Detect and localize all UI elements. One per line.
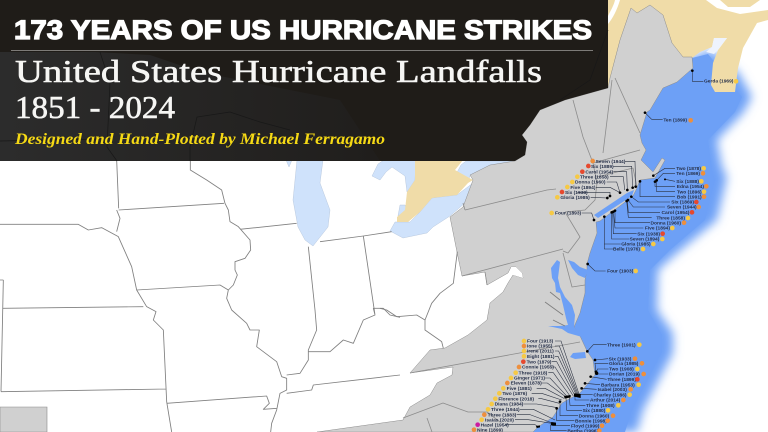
landfall labels: Maine and Nova Scotia xyxy=(691,69,738,85)
inland labels with dots: Isaias (2020) xyxy=(485,417,514,423)
offshore labels with dots: Six (1869) xyxy=(671,200,694,206)
landfall labels: Ten 1899: Ten (1899) xyxy=(663,118,687,124)
Ohio and Kentucky state borders xyxy=(380,252,457,348)
offshore labels with dots: Six (1933) xyxy=(609,356,632,362)
offshore labels with dots: Barbara (1953) xyxy=(601,382,635,388)
inland labels with dots xyxy=(549,159,626,217)
inland labels with dots: Five (1881) xyxy=(507,386,532,392)
panel: lighter map area under banner xyxy=(0,52,380,161)
inland labels with dots: Gloria (1985) xyxy=(560,195,590,201)
inland labels with dots: Three (1883) xyxy=(488,412,517,418)
offshore labels with dots: Arthur (2014) xyxy=(590,398,621,404)
subtitle line 2: 1851 - 2024 xyxy=(15,89,175,125)
offshore labels with dots: Two (1878) xyxy=(676,166,701,172)
White West Virginia notch fill xyxy=(511,267,523,278)
Long Island Sound xyxy=(594,190,634,218)
title panel xyxy=(0,0,608,161)
offshore labels with dots: Seven (1894) xyxy=(630,237,660,243)
offshore labels with dots: Donna (1960) xyxy=(579,413,610,419)
offshore labels with dots: Dorian (2019) xyxy=(609,372,640,378)
panel: ghost map lines xyxy=(0,30,608,161)
connectors xyxy=(505,341,608,431)
offshore labels with dots: Five (1894) xyxy=(645,226,670,232)
Minas Basin xyxy=(706,38,727,54)
landfall labels: New York and New England xyxy=(549,159,709,275)
Gulf of St Lawrence xyxy=(706,0,768,14)
landfall labels: North Carolina xyxy=(472,339,646,432)
offshore labels with dots: Carol (1954) xyxy=(662,210,690,216)
inland labels with dots: Two (1879) xyxy=(527,359,552,365)
St Lawrence river xyxy=(608,0,620,24)
inland labels with dots: Three (1858) xyxy=(580,174,609,180)
Chesapeake Bay xyxy=(548,260,582,337)
offshore labels with dots: Six (1888) xyxy=(676,179,699,185)
Midwest state borders xyxy=(0,160,400,432)
label: Gerda: Gerda (1969) xyxy=(704,79,734,85)
inland labels with dots: Five (1894) xyxy=(570,185,596,191)
offshore labels with dots: Ten (1869) xyxy=(676,171,700,177)
inland labels with dots: Four (1913) xyxy=(527,339,554,345)
inland labels with dots: Six (1889) xyxy=(591,164,614,170)
Eastern state borders xyxy=(403,78,640,432)
inland labels with dots: Florence (2018) xyxy=(498,396,534,402)
inland labels with dots: Six (1938) xyxy=(565,190,588,196)
subtitle line 1: United States Hurricane Landfalls xyxy=(15,53,542,89)
Canada: eastern provinces xyxy=(608,0,768,92)
inland labels with dots: Donna (1960) xyxy=(575,180,606,186)
inland labels with dots: Eleven (1878) xyxy=(511,381,542,387)
offshore labels with dots xyxy=(607,166,709,275)
Virginia river lines xyxy=(545,292,565,326)
inland labels with dots: Seven (1944) xyxy=(596,159,626,165)
landfall points xyxy=(586,174,666,265)
offshore labels with dots: Bob (1991) xyxy=(677,194,702,200)
Albemarle Sound xyxy=(570,352,586,359)
offshore labels with dots: Isabel (2003) xyxy=(598,387,627,393)
offshore labels with dots: Two (1896) xyxy=(677,189,702,195)
inland labels with dots: Diana (1984) xyxy=(495,402,524,408)
inland labels with dots xyxy=(472,339,555,432)
Ontario peninsula xyxy=(397,160,473,222)
heading: 173 YEARS OF US HURRICANE STRIKES xyxy=(14,15,592,45)
offshore labels with dots: Three (1858) xyxy=(656,215,685,221)
offshore labels with dots: Bonnie (1998) xyxy=(575,418,607,424)
inland labels with dots: Eight (1881) xyxy=(527,354,555,360)
offshore labels with dots: Floyd (1999) xyxy=(571,423,600,429)
inland labels with dots: Ione (1955) xyxy=(527,344,553,350)
ocean: Atlantic coastal waters xyxy=(520,50,752,432)
Lake Huron xyxy=(372,160,416,192)
landfall point xyxy=(691,69,694,72)
landfall points xyxy=(536,393,581,428)
offshore labels with dots: Six (1880) xyxy=(583,408,606,414)
heading rule xyxy=(11,50,593,51)
ocean: near-shore solid water xyxy=(520,54,742,432)
inland labels with dots: Carol (1954) xyxy=(585,169,614,175)
panel: dark base xyxy=(0,0,608,161)
Oklahoma grey block xyxy=(0,407,47,432)
Lake Erie and St Clair xyxy=(390,182,477,238)
Great Lakes xyxy=(286,160,516,246)
offshore labels with dots: Seven (1944) xyxy=(667,205,697,211)
offshore labels with dots: Edna (1954) xyxy=(677,184,704,190)
inland labels with dots: Hazel (1954) xyxy=(481,422,509,428)
offshore labels with dots: Two (1908) xyxy=(609,367,634,373)
Eastern states landmass xyxy=(317,5,693,432)
offshore labels with dots: Three (1901) xyxy=(607,342,636,348)
inland labels with dots: Ginger (1971) xyxy=(514,376,545,382)
offshore labels with dots: Gloria (1985) xyxy=(621,242,651,248)
Lake Ontario xyxy=(455,161,516,181)
offshore labels with dots: Six (1938) xyxy=(637,231,660,237)
inland labels with dots: Four (1893) xyxy=(555,211,582,217)
offshore labels with dots: Three (1899) xyxy=(607,377,636,383)
offshore labels with dots xyxy=(567,342,646,432)
connectors xyxy=(577,161,675,271)
inland labels with dots: Connie (1955) xyxy=(522,365,554,371)
offshore labels with dots: Belle (1976) xyxy=(613,247,640,253)
offshore labels with dots: Donna (1960) xyxy=(650,220,681,226)
offshore labels with dots: Four (1903) xyxy=(607,269,634,275)
connector: Gerda xyxy=(692,71,703,81)
Delaware Bay xyxy=(568,260,588,278)
offshore labels with dots: Three (1908) xyxy=(586,403,615,409)
offshore labels with dots: Gloria (1985) xyxy=(609,361,639,367)
inland labels with dots: Three (1918) xyxy=(519,370,548,376)
dot: Gerda xyxy=(734,79,738,84)
landfall labels: Ten 1899 xyxy=(644,111,693,124)
offshore labels with dots: Charley (1986) xyxy=(593,392,627,398)
inland labels with dots: Irene (2011) xyxy=(527,349,554,355)
Lake Michigan xyxy=(286,160,330,246)
inland labels with dots: Three (1944) xyxy=(491,407,520,413)
inland labels with dots: Two (1876) xyxy=(502,391,527,397)
credit line: Designed and Hand-Plotted by Michael Ferragamo xyxy=(14,131,385,148)
